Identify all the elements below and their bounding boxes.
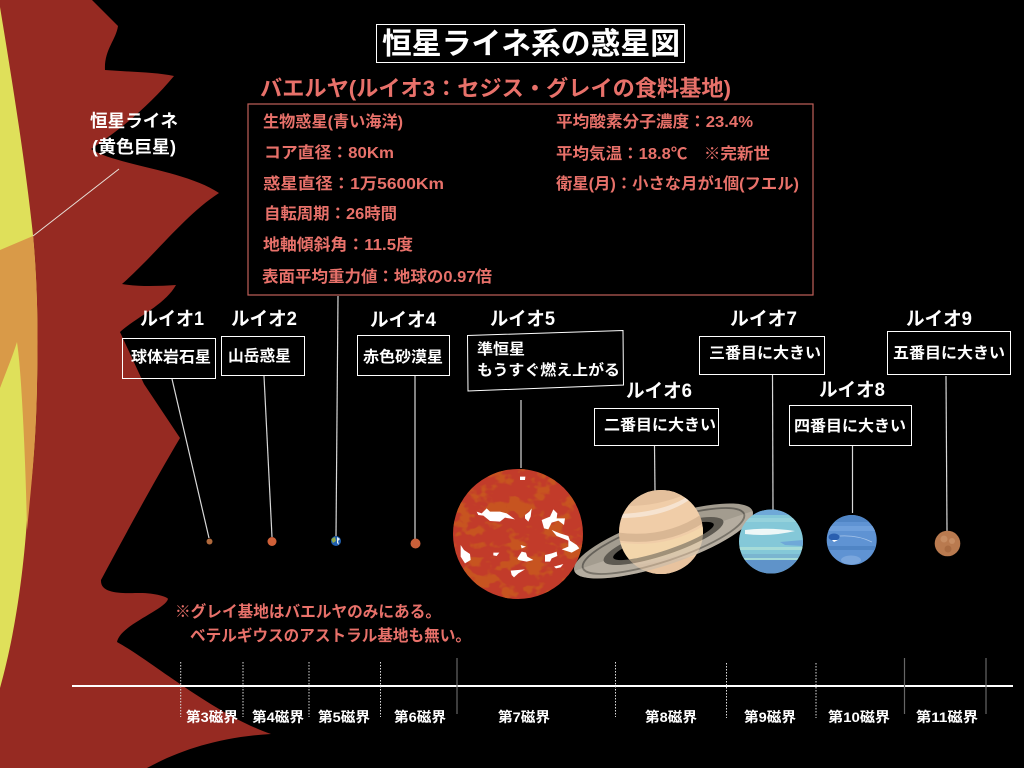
left column stats: 地軸傾斜角：11.5度	[263, 235, 413, 254]
right column stats: 平均酸素分子濃度：23.4%	[556, 112, 753, 131]
planet 2 label: 山岳惑星	[228, 347, 291, 365]
boundary labels: 第9磁界	[744, 709, 796, 725]
planet 3 leader line	[336, 296, 338, 536]
planet 6 label: 二番目に大きい	[604, 416, 716, 434]
planet 9 label	[888, 309, 1010, 531]
planet 9 label: 五番目に大きい	[893, 344, 1005, 362]
planet 8 label: 四番目に大きい	[794, 417, 906, 435]
planet 7 label: ルイオ7	[730, 309, 797, 330]
star label: 恒星ライネ	[90, 111, 178, 131]
planet 4 label: ルイオ4	[370, 310, 436, 331]
planet 3 Baeruya	[331, 536, 341, 546]
planet 5 label: 準恒星	[477, 340, 525, 358]
planet 6 label	[594, 381, 718, 491]
planet 8 blue storm	[826, 515, 878, 565]
planet 8 label	[790, 380, 912, 513]
planet 2 label	[222, 309, 304, 537]
boundary labels	[186, 709, 978, 725]
planet 7 label: 三番目に大きい	[709, 344, 821, 362]
left column stats: 生物惑星(青い海洋)	[263, 113, 403, 131]
boundary labels: 第5磁界	[318, 709, 370, 725]
boundary labels: 第3磁界	[186, 709, 238, 725]
right column stats	[556, 112, 799, 193]
planet 5 label: もうすぐ燃え上がる	[477, 361, 620, 379]
note	[175, 602, 471, 645]
left column stats: 惑星直径：1万5600Km	[263, 174, 444, 193]
star label	[33, 111, 178, 236]
planet 5 label: ルイオ5	[490, 309, 555, 330]
rings	[567, 488, 760, 594]
left column stats	[262, 113, 492, 286]
planet 4 label	[358, 310, 450, 539]
star label: (黄色巨星)	[92, 137, 176, 157]
right column stats: 平均気温：18.8℃ ※完新世	[556, 144, 770, 163]
planet 2	[268, 537, 276, 546]
planet 8 label: ルイオ8	[819, 380, 885, 401]
planet 7 label	[700, 309, 824, 510]
magnetic boundary scale	[72, 658, 1013, 725]
note: ※グレイ基地はバエルヤのみにある。	[175, 602, 441, 621]
ring front	[574, 511, 760, 594]
heading: バエルヤ(ルイオ3：セジス・グレイの食料基地)	[260, 76, 731, 101]
left column stats: 自転周期：26時間	[264, 204, 397, 223]
planet 6 ringed	[574, 490, 753, 578]
panel: Baeruya details	[248, 76, 813, 295]
planet 6 label: ルイオ6	[626, 381, 692, 402]
planet 4 label: 赤色砂漠星	[363, 347, 443, 366]
left column stats: 表面平均重力値：地球の0.97倍	[262, 267, 492, 286]
title: 恒星ライネ系の惑星図	[382, 28, 680, 61]
left column stats: コア直径：80Km	[264, 143, 394, 162]
panel border	[248, 104, 813, 295]
planet 1	[206, 538, 212, 544]
boundary labels: 第4磁界	[252, 709, 304, 725]
boundary labels: 第6磁界	[394, 709, 446, 725]
planet 1 label	[122, 309, 216, 538]
boundary labels: 第10磁界	[828, 709, 890, 725]
note: ベテルギウスのアストラル基地も無い。	[190, 627, 471, 645]
planet 4	[410, 538, 420, 548]
planet 9	[935, 531, 960, 556]
right column stats: 衛星(月)：小さな月が1個(フエル)	[556, 174, 799, 193]
white flares	[461, 477, 579, 577]
planet 5 protostar	[453, 469, 583, 599]
boundary labels: 第8磁界	[645, 709, 697, 725]
planet 9 label: ルイオ9	[906, 309, 972, 330]
planet 7 blue stripes	[739, 509, 803, 574]
planet 1 label: 球体岩石星	[131, 348, 211, 366]
planet 1 label: ルイオ1	[140, 309, 204, 330]
planet 2 label: ルイオ2	[231, 309, 297, 330]
boundary labels: 第11磁界	[916, 709, 978, 725]
planet 5 label	[468, 309, 624, 468]
planet body	[619, 490, 703, 574]
boundary labels: 第7磁界	[498, 709, 550, 725]
star Laine flames	[0, 0, 271, 768]
